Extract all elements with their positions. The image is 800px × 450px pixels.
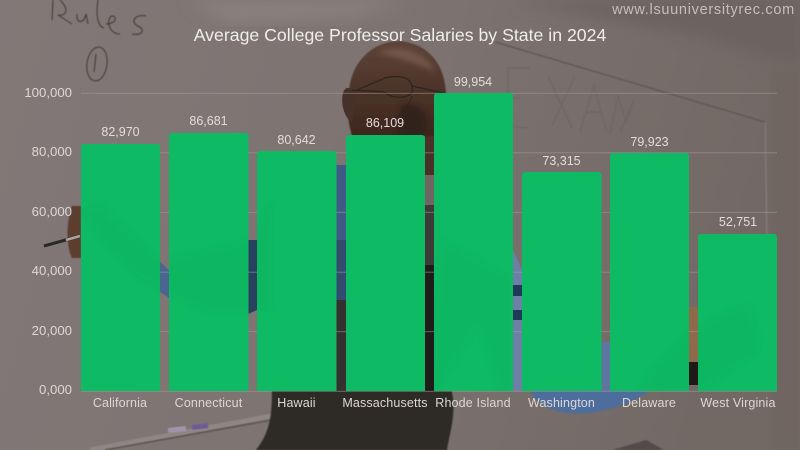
y-axis labels: 100,000 [24, 85, 72, 100]
value labels: 52,751 [719, 215, 757, 229]
value labels: 73,315 [542, 154, 581, 168]
category labels: Hawaii [277, 396, 316, 410]
value labels: 86,109 [366, 116, 404, 130]
category labels [93, 396, 776, 410]
value labels: 79,923 [630, 135, 669, 149]
bar: Connecticut [169, 133, 248, 391]
y-axis labels: 60,000 [32, 204, 72, 219]
bar: Rhode Island [434, 93, 513, 391]
bar: Delaware [610, 153, 689, 391]
value labels: 99,954 [454, 75, 492, 89]
category labels: West Virginia [700, 396, 776, 410]
bar chart: salaries by state [81, 93, 777, 391]
value labels: 80,642 [277, 133, 316, 147]
bar: West Virginia [698, 234, 777, 391]
bar: Massachusetts [346, 135, 425, 391]
category labels: Rhode Island [435, 396, 511, 410]
bar: Washington [522, 172, 602, 391]
horizontal grid lines [81, 93, 777, 391]
torso: dark vest [256, 385, 453, 450]
bar: California [81, 144, 160, 391]
bar: Hawaii [257, 151, 336, 391]
left hand with marker [68, 206, 81, 258]
glasses [352, 77, 448, 97]
y-axis labels: 0,000 [39, 382, 72, 397]
category labels: Massachusetts [342, 396, 428, 410]
y-axis labels: 40,000 [32, 263, 72, 278]
website watermark: www.lsuuniversityrec.com [611, 2, 795, 18]
gaps between bars showing the figure [336, 165, 346, 240]
faint shirt folds visible through bars [81, 200, 760, 391]
y-axis labels: 80,000 [32, 144, 72, 159]
title: Average College Professor Salaries by State in 2024 [194, 25, 606, 45]
category labels: Connecticut [175, 396, 243, 410]
value labels: 86,681 [189, 114, 228, 128]
head [347, 41, 446, 136]
whiteboard handwriting: Rules [52, 0, 146, 82]
category labels: Delaware [622, 396, 676, 410]
value labels: 82,970 [101, 125, 140, 139]
category labels: California [93, 396, 147, 410]
teacher photo figure [44, 41, 698, 450]
value labels [101, 75, 757, 229]
blue shirt sleeves [160, 262, 169, 298]
y-axis labels: 20,000 [32, 323, 72, 338]
y-axis labels [24, 85, 72, 397]
whiteboard handwriting: EXAM [508, 68, 634, 134]
right hand [689, 307, 698, 362]
category labels: Washington [528, 396, 595, 410]
